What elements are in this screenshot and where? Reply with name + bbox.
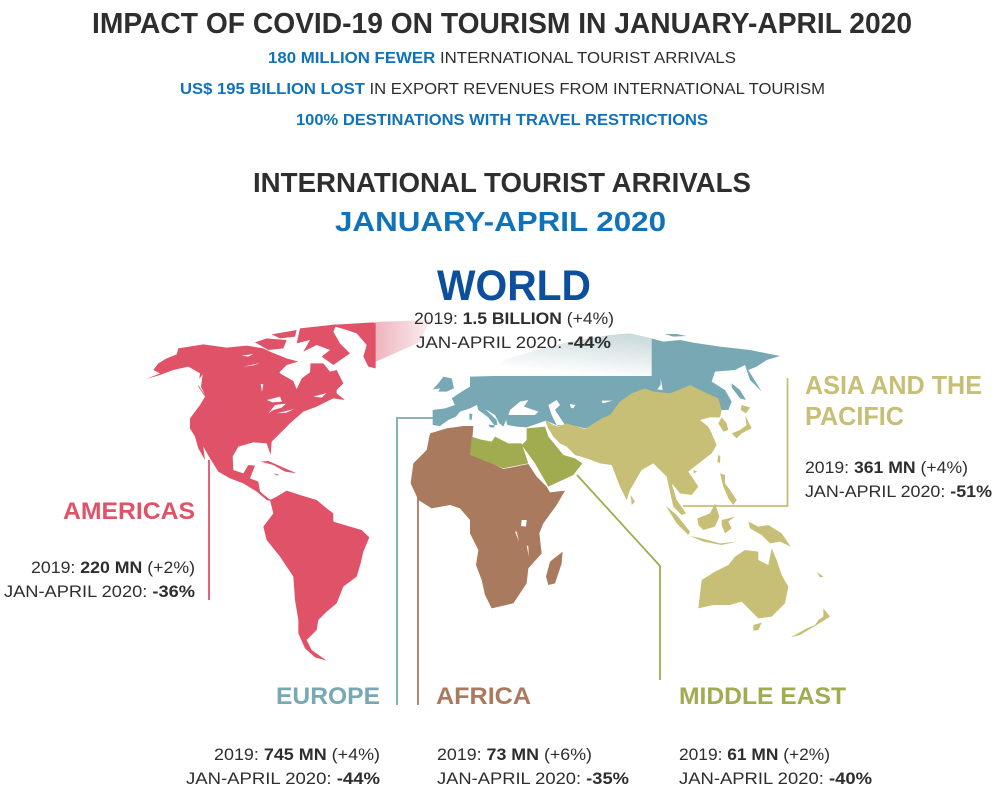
stat line: revenues lost: US$ 195 BILLION LOST IN EXPORT REVENUES FROM INTERNATIONAL TOURISM [180,81,825,98]
map: Greenland fade [375,320,430,362]
Middle East stats [679,745,872,788]
map: Europe [433,334,780,428]
connector: Europe [397,418,433,705]
map: Asia [545,385,752,515]
Americas label: AMERICAS [63,498,195,525]
world map [146,320,830,661]
map: northern Russia fade [493,333,652,376]
Asia and the Pacific stats: 2019: 361 MN (+4%) [805,458,968,477]
Middle East stats: 2019: 61 MN (+2%) [679,745,830,764]
world stats: 2019: 1.5 BILLION (+4%) [414,309,614,328]
Asia and the Pacific stats [805,458,992,501]
map: Middle East [470,427,582,487]
connector: Middle East [577,475,660,680]
world stats: JAN-APRIL 2020: -44% [416,333,611,352]
Africa stats: 2019: 73 MN (+6%) [437,745,592,764]
Europe stats: JAN-APRIL 2020: -44% [186,769,380,788]
Africa stats [437,745,629,788]
Middle East label: MIDDLE EAST [679,683,846,710]
map: South America [263,491,369,661]
title: IMPACT OF COVID-19 ON TOURISM IN JANUARY-APRIL 2020 [92,8,912,40]
connector: Americas [208,460,210,600]
Middle East stats: JAN-APRIL 2020: -40% [679,769,872,788]
map: Pacific islands and Australia [666,503,830,637]
Africa label: AFRICA [436,683,531,710]
connector: Asia and the Pacific [683,378,788,506]
stat line: fewer arrivals: 180 MILLION FEWER INTERNATIONAL TOURIST ARRIVALS [268,50,736,67]
world heading: WORLD [437,262,591,310]
Americas stats [4,558,195,601]
section heading: INTERNATIONAL TOURIST ARRIVALS [253,167,751,198]
Africa stats: JAN-APRIL 2020: -35% [437,769,629,788]
Asia and the Pacific stats: JAN-APRIL 2020: -51% [805,482,992,501]
Americas stats: JAN-APRIL 2020: -36% [4,582,195,601]
section subheading: JANUARY-APRIL 2020 [335,206,666,237]
connector: Africa [417,497,419,705]
world stats [414,309,614,352]
map: North America [146,322,376,502]
Europe stats [186,745,380,788]
map: Africa [411,426,565,608]
stat line: restrictions: 100% DESTINATIONS WITH TRAVEL RESTRICTIONS [296,112,708,129]
Asia and the Pacific label: PACIFIC [805,401,904,431]
Europe stats: 2019: 745 MN (+4%) [214,745,380,764]
Asia and the Pacific label [805,370,982,431]
Asia and the Pacific label: ASIA AND THE [805,370,982,400]
Americas stats: 2019: 220 MN (+2%) [31,558,195,577]
Europe label: EUROPE [276,683,380,710]
